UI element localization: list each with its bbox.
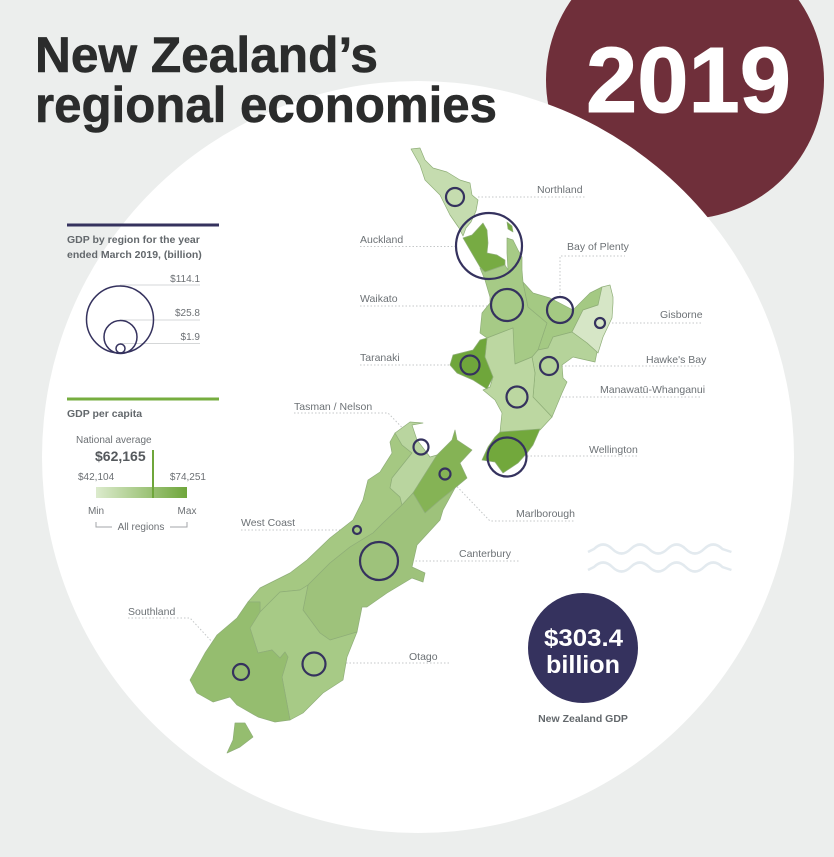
- title: regional economies: [35, 77, 497, 133]
- legend: GDP per capita: $62,165: [95, 448, 146, 464]
- legend: GDP per capita: National average: [76, 435, 152, 446]
- title: New Zealand’s: [35, 27, 378, 83]
- region labels: Tasman / Nelson: [294, 401, 372, 413]
- total GDP badge: [528, 593, 638, 725]
- region: Hawke's Bay: [532, 332, 597, 417]
- region: Manawatu-Whanganui: [483, 328, 552, 432]
- region: Southland: [190, 602, 290, 722]
- legend: GDP per capita: Min: [88, 506, 104, 517]
- title: [35, 27, 497, 133]
- region: Marlborough: [413, 430, 472, 513]
- leader lines: [128, 197, 701, 670]
- map: North Island: [411, 148, 613, 473]
- legend: GDP by region: ended March 2019, (billion): [67, 249, 202, 261]
- total GDP badge: billion: [546, 651, 620, 679]
- region labels: Southland: [128, 606, 175, 618]
- legend: GDP by region: [67, 224, 219, 354]
- legend: GDP by region: $25.8: [175, 308, 200, 319]
- year badge: [546, 0, 824, 219]
- region labels: Manawatū-Whanganui: [600, 384, 705, 396]
- region: Gisborne: [572, 285, 613, 353]
- region: West Coast: [248, 433, 412, 612]
- legend: GDP per capita: All regions: [118, 522, 164, 533]
- region labels: Northland: [537, 184, 583, 196]
- legend: GDP by region: GDP by region for the year: [67, 234, 200, 246]
- region labels: Marlborough: [516, 508, 575, 520]
- region: Auckland: [463, 222, 513, 272]
- region: Taranaki: [450, 338, 493, 389]
- region: Canterbury: [303, 488, 455, 640]
- region labels: West Coast: [241, 517, 295, 529]
- map: South Island: [190, 422, 472, 753]
- total GDP badge: $303.4: [544, 625, 624, 652]
- region: Stewart Island: [227, 723, 253, 753]
- region labels: Hawke's Bay: [646, 354, 707, 366]
- white circle panel: [42, 81, 794, 833]
- region: Waikato: [480, 238, 547, 364]
- total GDP badge: New Zealand GDP: [538, 713, 628, 725]
- region labels: [128, 184, 707, 663]
- region labels: Otago: [409, 651, 438, 663]
- decorative waves icon: [588, 544, 731, 572]
- region: Northland: [411, 148, 478, 236]
- legend: GDP by region: $1.9: [181, 332, 200, 343]
- legend: GDP per capita: $74,251: [170, 472, 206, 483]
- region labels: Auckland: [360, 234, 403, 246]
- region: Otago: [250, 585, 357, 720]
- legend: GDP by region: $114.1: [170, 274, 200, 285]
- GDP circles: [233, 188, 605, 680]
- region labels: Canterbury: [459, 548, 512, 560]
- legend: GDP per capita: Max: [178, 506, 196, 517]
- region labels: Taranaki: [360, 352, 400, 364]
- region labels: Bay of Plenty: [567, 241, 630, 253]
- region: Bay of Plenty: [523, 282, 602, 350]
- region labels: Waikato: [360, 293, 398, 305]
- legend: GDP per capita: [67, 398, 219, 533]
- region labels: Gisborne: [660, 309, 703, 321]
- year: 2019: [586, 28, 791, 132]
- legend: GDP per capita: $42,104: [78, 472, 115, 483]
- legend: GDP per capita: GDP per capita: [67, 408, 142, 420]
- region labels: Wellington: [589, 444, 638, 456]
- region: Tasman / Nelson: [390, 422, 437, 505]
- region: Wellington: [482, 429, 540, 473]
